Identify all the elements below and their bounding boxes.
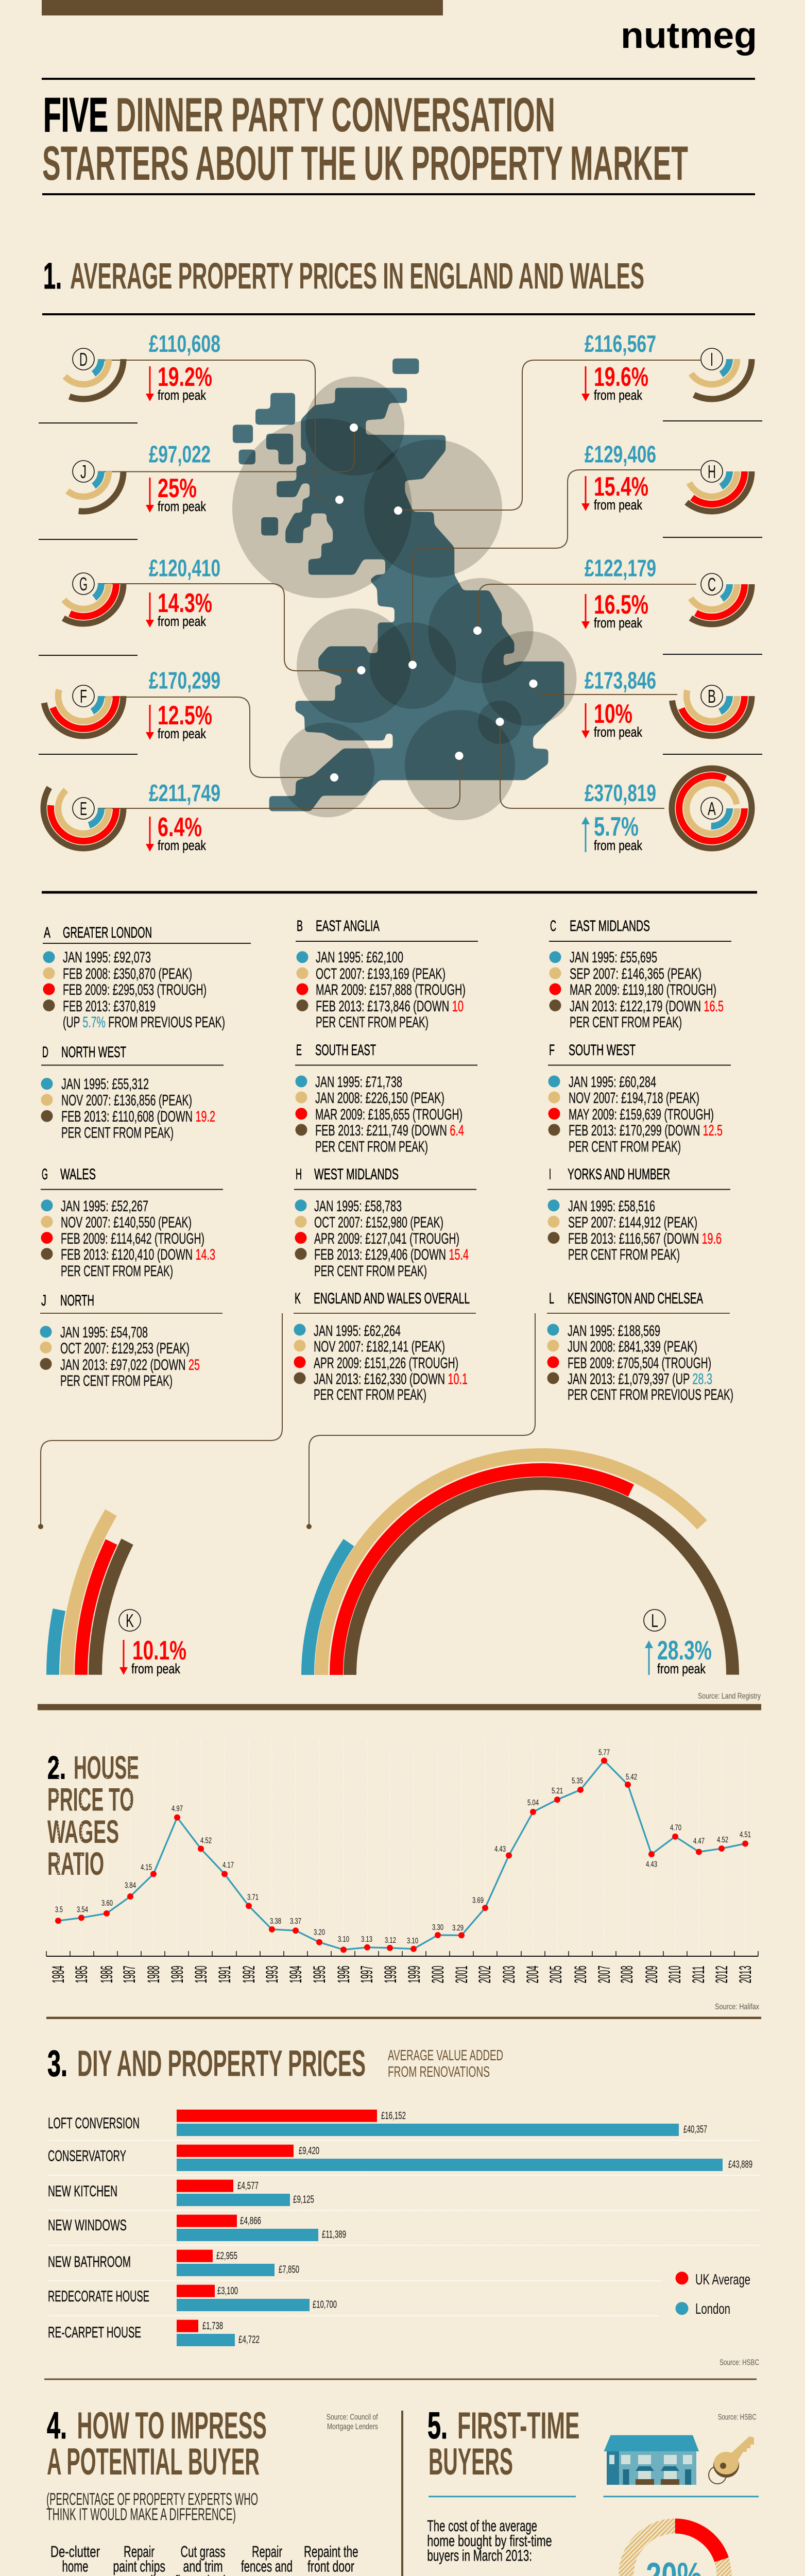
heading: section 3: DIY AND PROPERTY PRICES: [77, 2044, 366, 2084]
region list: I Yorks and Humber: [547, 1166, 730, 1263]
callout: A Greater London: [581, 769, 752, 853]
bar chart: DIY value added: £4,577: [237, 2180, 259, 2192]
bar chart: DIY value added: RE-CARPET HOUSE: [48, 2324, 141, 2341]
bar chart: DIY value added: LOFT CONVERSION: [48, 2115, 140, 2132]
callout: G Wales: G: [79, 573, 88, 595]
region list: G Wales: JAN 1995: £52,267: [61, 1198, 148, 1215]
bar chart: DIY value added: £9,420: [299, 2145, 319, 2157]
region list: K England and Wales overall: NOV 2007: £182,141 (PEAK): [314, 1338, 445, 1355]
region list: D North West: PER CENT FROM PEAK): [61, 1125, 174, 1142]
callout: B East Anglia: B: [708, 686, 716, 707]
region list: H West Midlands: WEST MIDLANDS: [314, 1166, 399, 1183]
panel: how to impress a potential buyer: [45, 2405, 378, 2576]
source: HSBC: Source: HSBC: [718, 2413, 757, 2422]
heading: section 4: (PERCENTAGE OF PROPERTY EXPERTS WHO: [46, 2489, 258, 2509]
line chart: house price to wages ratio: 4.51: [740, 1831, 751, 1839]
region list: E South East: MAR 2009: £185,655 (TROUGH): [315, 1106, 463, 1123]
region list: J North: J: [41, 1292, 46, 1309]
region list: C East Midlands: [549, 918, 731, 1031]
region list: G Wales: [41, 1166, 223, 1280]
line chart: house price to wages ratio: 4.43: [494, 1845, 506, 1854]
region list: B East Anglia: [296, 918, 478, 1031]
arcs: L Kensington and Chelsea: [308, 1442, 775, 1908]
heading: section 2: [47, 1750, 139, 1882]
line chart: house price to wages ratio: 2002: [475, 1965, 494, 1983]
region list: I Yorks and Humber: SEP 2007: £144,912 (PEAK): [568, 1214, 697, 1231]
line chart: house price to wages ratio: 1984: [49, 1965, 67, 1983]
donut chart: 20 per cent deposit: [603, 2526, 734, 2576]
callout: H West Midlands: 15.4%: [594, 472, 648, 502]
bar chart: DIY value added: £43,889: [728, 2159, 752, 2170]
source: Land Registry: Source: Land Registry: [698, 1692, 761, 1701]
region list: C East Midlands: EAST MIDLANDS: [570, 918, 650, 935]
regional price circles: [232, 377, 577, 820]
callout: B East Anglia: [581, 656, 762, 755]
legend: London: [695, 2301, 730, 2317]
item labels row 1: De-clutter: [50, 2543, 100, 2561]
line chart: house price to wages ratio: 1986: [97, 1965, 116, 1983]
line chart: house price to wages ratio: 3.30: [432, 1923, 443, 1932]
text: cost of average home: The cost of the average: [427, 2517, 537, 2535]
item labels row 1: [50, 2543, 358, 2576]
heading: section 2: WAGES: [47, 1814, 119, 1850]
region list: K England and Wales overall: PER CENT FROM PEAK): [314, 1386, 426, 1403]
region list: E South East: FEB 2013: £211,749 (DOWN 6.4: [315, 1122, 464, 1139]
callout: G Wales: [39, 544, 220, 656]
line chart: house price to wages ratio: 1995: [310, 1965, 329, 1983]
arcs: K England and Wales overall: 10.1%: [132, 1636, 186, 1666]
region list: H West Midlands: PER CENT FROM PEAK): [314, 1263, 427, 1280]
text: cost of average home: buyers in March 2013:: [427, 2547, 532, 2565]
region list: F South West: F: [549, 1042, 555, 1059]
line chart: house price to wages ratio: 2012: [712, 1965, 731, 1983]
line chart: house price to wages ratio: 1997: [357, 1965, 376, 1983]
region list: H West Midlands: OCT 2007: £152,980 (PEAK): [314, 1214, 443, 1231]
bar chart: DIY value added: £1,738: [202, 2320, 223, 2332]
line chart: house price to wages ratio: 4.70: [670, 1824, 681, 1832]
line chart: house price to wages ratio: 1985: [72, 1965, 91, 1983]
region list: E South East: PER CENT FROM PEAK): [315, 1139, 428, 1156]
region list: A Greater London: FEB 2009: £295,053 (TROUGH): [63, 981, 207, 998]
region list: C East Midlands: JAN 2013: £122,179 (DOWN 16.5: [570, 998, 724, 1015]
heading: section 4: HOW TO IMPRESS: [77, 2405, 267, 2447]
source: Council of Mortgage Lenders: [327, 2413, 378, 2431]
heading: section 5: 5.: [427, 2405, 448, 2447]
heading: section 2: 2.: [47, 1750, 66, 1786]
callout: G Wales: 14.3%: [158, 588, 212, 618]
callout: H West Midlands: [581, 432, 762, 538]
region list: F South West: JAN 1995: £60,284: [569, 1074, 656, 1091]
bar chart: DIY value added: £11,389: [322, 2229, 346, 2240]
line chart: house price to wages ratio: 3.10: [338, 1935, 349, 1944]
region list: I Yorks and Humber: YORKS AND HUMBER: [568, 1166, 670, 1183]
line chart: house price to wages ratio: 2011: [689, 1965, 708, 1983]
line chart: house price to wages ratio: 1993: [263, 1965, 281, 1983]
line chart: house price to wages ratio: 2007: [595, 1965, 613, 1983]
title: FIVE: [43, 88, 108, 142]
region list: J North: JAN 1995: £54,708: [60, 1324, 148, 1341]
region list: K England and Wales overall: APR 2009: £151,226 (TROUGH): [314, 1355, 458, 1372]
line chart: house price to wages ratio: 3.71: [247, 1893, 259, 1902]
callout: C East Midlands: [581, 544, 762, 655]
logo: nutmeg: nutmeg: [621, 15, 757, 56]
line chart: house price to wages ratio: 5.35: [572, 1777, 583, 1786]
callout: J North: J: [80, 461, 87, 482]
line chart: house price to wages ratio: 1989: [168, 1965, 186, 1983]
region list: L Kensington and Chelsea: JAN 1995: £188,569: [568, 1323, 660, 1340]
region list: K England and Wales overall: JAN 2013: £162,330 (DOWN 10.1: [314, 1370, 468, 1388]
bar chart: DIY value added: £4,722: [238, 2334, 260, 2345]
item labels row 1: Repair: [124, 2543, 155, 2561]
callout: C East Midlands: from peak: [594, 615, 642, 631]
title: [42, 88, 688, 190]
region list: G Wales: NOV 2007: £140,550 (PEAK): [61, 1214, 192, 1231]
region list: B East Anglia: JAN 1995: £62,100: [316, 949, 403, 966]
line chart: house price to wages ratio: 2004: [523, 1965, 542, 1983]
region list: I Yorks and Humber: FEB 2013: £116,567 (DOWN 19.6: [568, 1230, 722, 1247]
line chart: house price to wages ratio: 4.52: [717, 1836, 728, 1844]
line chart: house price to wages ratio: 3.13: [361, 1935, 372, 1944]
region list: C East Midlands: PER CENT FROM PEAK): [570, 1014, 682, 1031]
source: Halifax: Source: Halifax: [715, 2003, 759, 2011]
region list: F South West: SOUTH WEST: [569, 1042, 636, 1059]
region list: L Kensington and Chelsea: JAN 2013: £1,079,397 (UP 28.3: [568, 1370, 712, 1388]
line chart: house price to wages ratio: 5.42: [626, 1773, 637, 1782]
region list: E South East: E: [296, 1042, 302, 1059]
line chart: house price to wages ratio: 2003: [500, 1965, 518, 1983]
region list: H West Midlands: [294, 1166, 476, 1280]
line chart: house price to wages ratio: 1991: [215, 1965, 234, 1983]
region list: D North West: NORTH WEST: [61, 1044, 126, 1061]
callout: A Greater London: A: [708, 798, 716, 819]
region list: D North West: JAN 1995: £55,312: [61, 1076, 149, 1093]
region list: D North West: FEB 2013: £110,608 (DOWN 19.2: [61, 1108, 215, 1125]
heading: section 3: AVERAGE VALUE ADDED: [388, 2047, 503, 2064]
top bar: [42, 0, 443, 15]
region list: F South West: [548, 1042, 731, 1156]
heading: section 4: THINK IT WOULD MAKE A DIFFERENCE): [46, 2505, 236, 2523]
callout: F South West: 12.5%: [158, 701, 212, 731]
item labels row 1: fences and: [241, 2557, 293, 2575]
region list: E South East: SOUTH EAST: [315, 1042, 376, 1059]
icon: houses: [604, 2435, 699, 2485]
callout: G Wales: from peak: [158, 614, 206, 629]
line chart: house price to wages ratio: 4.15: [141, 1863, 152, 1872]
callout: J North: from peak: [158, 499, 206, 514]
legend: UK Average: [695, 2272, 750, 2288]
region list: J North: PER CENT FROM PEAK): [60, 1372, 173, 1389]
bar chart: DIY value added: £2,955: [216, 2250, 237, 2262]
line chart: house price to wages ratio: 5.04: [527, 1799, 539, 1807]
region list: B East Anglia: EAST ANGLIA: [316, 918, 380, 935]
line chart: house price to wages ratio: 1990: [192, 1965, 210, 1983]
item labels row 1: Cut grass: [180, 2543, 226, 2561]
line chart: house price to wages ratio: 3.10: [407, 1937, 418, 1945]
line chart: house price to wages ratio: 2008: [618, 1965, 636, 1983]
region list: C East Midlands: MAR 2009: £119,180 (TROUGH): [570, 981, 716, 998]
line chart: house price to wages ratio: 4.52: [200, 1837, 212, 1845]
region list: D North West: NOV 2007: £136,856 (PEAK): [61, 1092, 192, 1109]
item labels row 1: front door: [307, 2557, 354, 2575]
region list: J North: [40, 1292, 222, 1389]
arcs: K England and Wales overall: [53, 1340, 722, 2009]
item labels row 1: and trim: [183, 2557, 222, 2575]
region list: E South East: JAN 1995: £71,738: [315, 1074, 402, 1091]
callout: A Greater London: 5.7%: [594, 812, 639, 842]
callout: H West Midlands: £129,406: [585, 441, 656, 468]
region list: I Yorks and Humber: PER CENT FROM PEAK): [568, 1246, 680, 1263]
line chart: house price to wages ratio: 2001: [452, 1965, 471, 1983]
line chart: house price to wages ratio: 3.38: [270, 1917, 281, 1926]
line chart: house price to wages ratio: 1994: [286, 1965, 305, 1983]
line chart: house price to wages ratio: 4.17: [222, 1861, 234, 1870]
item labels row 1: Repaint the: [304, 2543, 358, 2561]
callout: I Yorks and Humber: from peak: [594, 387, 642, 403]
arcs: L Kensington and Chelsea: from peak: [657, 1661, 706, 1676]
callout: F South West: F: [80, 686, 87, 707]
callout: I Yorks and Humber: £116,567: [585, 330, 656, 357]
line chart: house price to wages ratio: 2010: [665, 1965, 684, 1983]
region list: F South West: FEB 2013: £170,299 (DOWN 12.5: [569, 1122, 723, 1139]
heading: section 1: 1.: [43, 256, 62, 297]
map location dots: [330, 423, 538, 782]
map landmass: [233, 359, 564, 811]
arcs: K England and Wales overall: from peak: [131, 1661, 180, 1676]
callout: F South West: from peak: [158, 726, 206, 741]
arcs: L Kensington and Chelsea: L: [651, 1610, 658, 1631]
region list: A Greater London: A: [44, 924, 50, 941]
region list: L Kensington and Chelsea: FEB 2009: £705,504 (TROUGH): [568, 1355, 711, 1372]
callout: E South East: £211,749: [149, 779, 220, 806]
source: Council of Mortgage Lenders: Mortgage Lenders: [327, 2422, 378, 2431]
region list: C East Midlands: SEP 2007: £146,365 (PEAK): [570, 965, 701, 982]
line chart: house price to wages ratio: 3.60: [101, 1899, 113, 1908]
bar chart: DIY value added: £40,357: [683, 2124, 707, 2135]
region list: A Greater London: FEB 2013: £370,819: [63, 998, 156, 1015]
region list: B East Anglia: PER CENT FROM PEAK): [316, 1014, 429, 1031]
callout: D North West: £110,608: [149, 330, 220, 357]
region list: L Kensington and Chelsea: [547, 1290, 733, 1403]
panel: first-time buyers: [427, 2405, 759, 2576]
line chart: house price to wages ratio: 5.77: [598, 1749, 610, 1757]
arcs: L Kensington and Chelsea: 28.3%: [657, 1636, 712, 1666]
connector K and L: [38, 1313, 535, 1529]
region list: H West Midlands: FEB 2013: £129,406 (DOWN 15.4: [314, 1246, 469, 1263]
region list: A Greater London: GREATER LONDON: [63, 924, 152, 941]
region list: B East Anglia: OCT 2007: £193,169 (PEAK): [316, 965, 446, 982]
line chart: house price to wages ratio: 3.54: [77, 1906, 88, 1914]
heading: section 4: 4.: [47, 2405, 67, 2447]
line chart: house price to wages ratio: 1992: [239, 1965, 258, 1983]
heading: section 2: HOUSE: [74, 1750, 139, 1786]
region list: C East Midlands: C: [550, 918, 556, 935]
region list: L Kensington and Chelsea: KENSINGTON AND CHELSEA: [568, 1290, 703, 1307]
heading: section 3: 3.: [47, 2044, 67, 2084]
connector lines: [98, 360, 700, 808]
line chart: house price to wages ratio: 3.69: [472, 1896, 484, 1905]
region list: D North West: [41, 1044, 224, 1142]
region list: H West Midlands: H: [296, 1166, 302, 1183]
callout: H West Midlands: from peak: [594, 497, 642, 513]
text: cost of average home: [427, 2517, 560, 2576]
line chart: house price to wages ratio: 3.37: [290, 1917, 301, 1926]
callout: I Yorks and Humber: [581, 319, 762, 421]
region list: F South West: MAY 2009: £159,639 (TROUGH): [569, 1106, 714, 1123]
region list: H West Midlands: JAN 1995: £58,783: [314, 1198, 402, 1215]
heading: section 4: [46, 2405, 267, 2523]
line chart: house price to wages ratio: 1987: [120, 1965, 139, 1983]
bar chart: DIY value added: £16,152: [381, 2110, 406, 2122]
region list: G Wales: G: [42, 1166, 48, 1183]
bar chart: DIY value added: NEW BATHROOM: [48, 2253, 131, 2270]
callout: H West Midlands: H: [708, 461, 716, 482]
bar chart: DIY value added: £4,866: [240, 2215, 261, 2227]
arcs: K England and Wales overall: K: [126, 1610, 134, 1631]
line chart: house price to wages ratio: 2013: [736, 1965, 755, 1983]
source: HSBC: Source: HSBC: [720, 2359, 759, 2367]
callout: I Yorks and Humber: 19.6%: [594, 362, 648, 392]
line chart: house price to wages ratio: 1996: [334, 1965, 353, 1983]
callout: I Yorks and Humber: I: [710, 349, 713, 370]
item labels row 1: home: [62, 2557, 89, 2575]
callout: C East Midlands: C: [708, 574, 716, 595]
region list: G Wales: FEB 2013: £120,410 (DOWN 14.3: [61, 1246, 215, 1263]
region list: J North: OCT 2007: £129,253 (PEAK): [60, 1340, 190, 1357]
heading: section 2: RATIO: [47, 1846, 104, 1882]
region list: A Greater London: (UP 5.7% FROM PREVIOUS PEAK): [63, 1014, 225, 1031]
region list: A Greater London: FEB 2008: £350,870 (PEAK): [63, 965, 192, 982]
bar chart: DIY value added: REDECORATE HOUSE: [48, 2288, 149, 2305]
region list: B East Anglia: FEB 2013: £173,846 (DOWN 10: [316, 998, 464, 1015]
region list: G Wales: FEB 2009: £114,642 (TROUGH): [61, 1230, 204, 1247]
region list: F South West: PER CENT FROM PEAK): [569, 1139, 681, 1156]
line chart: house price to wages ratio: 2000: [429, 1965, 447, 1983]
callout: E South East: from peak: [158, 838, 206, 853]
line chart: house price to wages ratio: 5.21: [552, 1787, 563, 1795]
heading: section 4: A POTENTIAL BUYER: [47, 2441, 260, 2483]
callout: D North West: [39, 319, 220, 423]
region list: L Kensington and Chelsea: L: [549, 1290, 554, 1307]
region list: A Greater London: [43, 924, 251, 1031]
bar chart: DIY value added: NEW WINDOWS: [48, 2217, 127, 2234]
region list: L Kensington and Chelsea: JUN 2008: £841,339 (PEAK): [568, 1338, 697, 1355]
line chart: house price to wages ratio: 4.97: [172, 1804, 183, 1813]
callout: D North West: from peak: [158, 387, 206, 403]
callout: C East Midlands: £122,179: [585, 555, 656, 582]
region list: E South East: JAN 2008: £226,150 (PEAK): [315, 1090, 444, 1107]
region list: G Wales: WALES: [60, 1166, 96, 1183]
callout: E South East: 6.4%: [158, 812, 202, 842]
callout: J North: £97,022: [149, 441, 211, 468]
text: cost of average home: home bought by first-time: [427, 2532, 552, 2550]
callout: B East Anglia: 10%: [594, 699, 632, 729]
callout: J North: [39, 432, 211, 540]
heading: section 5: BUYERS: [429, 2441, 513, 2483]
region list: I Yorks and Humber: JAN 1995: £58,516: [568, 1198, 655, 1215]
line chart: house price to wages ratio: 4.47: [693, 1837, 705, 1845]
heading: section 2: PRICE TO: [47, 1782, 134, 1818]
line chart: house price to wages ratio: 3.84: [125, 1882, 136, 1890]
bar chart: DIY value added: £10,700: [313, 2299, 337, 2310]
line chart: house price to wages ratio: 3.20: [314, 1928, 325, 1937]
callout: E South East: [43, 769, 220, 853]
region list: K England and Wales overall: ENGLAND AND WALES OVERALL: [314, 1290, 470, 1307]
region list: K England and Wales overall: [294, 1290, 476, 1403]
callout: A Greater London: £370,819: [585, 779, 656, 806]
region list: D North West: D: [42, 1044, 48, 1061]
callout: F South West: £170,299: [149, 667, 220, 694]
region list: C East Midlands: JAN 1995: £55,695: [570, 949, 657, 966]
region list: K England and Wales overall: K: [295, 1290, 301, 1307]
callout: C East Midlands: 16.5%: [594, 590, 648, 620]
callout: B East Anglia: from peak: [594, 724, 642, 740]
source: Council of Mortgage Lenders: Source: Council of: [327, 2413, 378, 2422]
callout: D North West: 19.2%: [158, 362, 212, 392]
line chart: house price to wages ratio: 2006: [571, 1965, 590, 1983]
bar chart: DIY value added: CONSERVATORY: [48, 2148, 126, 2165]
bar chart: DIY value added: [48, 2110, 760, 2346]
callout: F South West: [39, 656, 220, 755]
region list: J North: JAN 2013: £97,022 (DOWN 25: [60, 1357, 200, 1374]
line chart: house price to wages ratio: 1988: [144, 1965, 163, 1983]
line chart: house price to wages ratio: 3.5: [55, 1906, 63, 1914]
region list: B East Anglia: MAR 2009: £157,888 (TROUGH): [316, 981, 466, 998]
region list: A Greater London: JAN 1995: £92,073: [63, 949, 151, 966]
callout: E South East: E: [80, 798, 87, 819]
region list: K England and Wales overall: JAN 1995: £62,264: [314, 1323, 401, 1340]
region list: G Wales: PER CENT FROM PEAK): [61, 1263, 173, 1280]
callout: B East Anglia: £173,846: [585, 667, 656, 694]
line chart: house price to wages ratio: 4.43: [646, 1860, 657, 1869]
heading: section 5: [427, 2405, 580, 2483]
line chart: house price to wages ratio: [46, 1740, 758, 1983]
icon: key: [709, 2436, 754, 2484]
region list: I Yorks and Humber: I: [549, 1166, 551, 1183]
bar chart: DIY value added: NEW KITCHEN: [48, 2183, 117, 2200]
line chart: house price to wages ratio: 2005: [546, 1965, 565, 1983]
callout: J North: 25%: [158, 473, 197, 503]
callout: A Greater London: from peak: [594, 838, 642, 853]
heading: section 3: FROM RENOVATIONS: [388, 2064, 490, 2080]
map of England and Wales: [232, 359, 577, 820]
item labels row 1: Repair: [252, 2543, 282, 2561]
line chart: house price to wages ratio: 3.29: [452, 1924, 464, 1933]
line chart: house price to wages ratio: 2009: [642, 1965, 661, 1983]
bar chart: DIY value added: £9,125: [293, 2194, 314, 2205]
region list: H West Midlands: APR 2009: £127,041 (TROUGH): [314, 1230, 459, 1247]
region list: J North: NORTH: [60, 1292, 94, 1309]
item labels row 1: paint chips: [113, 2557, 165, 2575]
line chart: house price to wages ratio: 1999: [405, 1965, 423, 1983]
bar chart: DIY value added: £7,850: [279, 2264, 299, 2275]
bar chart: DIY value added: £3,100: [217, 2285, 238, 2297]
region list: E South East: [295, 1042, 477, 1156]
line chart: house price to wages ratio: 3.12: [385, 1936, 396, 1945]
line chart: house price to wages ratio: 1998: [381, 1965, 400, 1983]
callout: D North West: D: [79, 349, 88, 370]
heading: section 5: FIRST-TIME: [457, 2405, 580, 2447]
region list: F South West: NOV 2007: £194,718 (PEAK): [569, 1090, 699, 1107]
legend: [676, 2272, 750, 2317]
callout: G Wales: £120,410: [149, 555, 220, 582]
region list: B East Anglia: B: [297, 918, 303, 935]
